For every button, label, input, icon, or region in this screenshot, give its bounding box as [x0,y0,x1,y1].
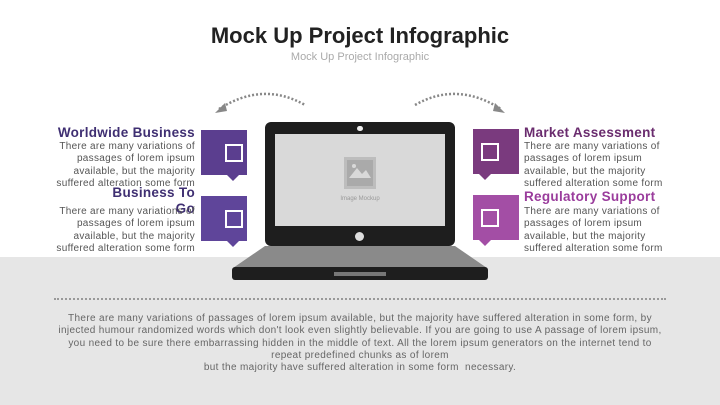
subtitle: Mock Up Project Infographic [291,51,429,63]
laptop: Image Mockup [340,196,380,202]
panel: Regulatory Support: passages of lorem ipsum [524,218,642,229]
arrow: left dotted arc [215,92,305,113]
panel: Market Assessment: There are many variations of [524,141,660,152]
panel: Business To Go: passages of lorem ipsum [77,218,195,229]
panel: Worldwide Business: Worldwide Business [58,125,195,140]
footer text block: repeat predefined chunks as of lorem [271,350,449,361]
footer text block: but the majority have suffered alteration in some form necessary. [204,362,516,373]
panel: Market Assessment: available, but the majority [524,166,646,177]
panel: Regulatory Support [473,189,663,254]
footer text block: injected humour randomized words which don't look even slightly believable. If you are going to use A passage of lorem ipsum, [58,325,662,336]
panel: Business To Go: Go [176,201,195,216]
panel: Regulatory Support: There are many variations of [524,206,660,217]
panel: Worldwide Business [56,125,247,189]
base [232,246,488,280]
panel: Regulatory Support: Regulatory Support [524,189,655,204]
icon: image placeholder [344,157,376,189]
laptop [232,122,488,280]
panel: Regulatory Support: suffered alteration some form [524,243,663,254]
panel: Business To Go: available, but the majority [74,231,195,242]
panel: Business To Go: Business To [112,185,195,200]
screen [275,134,445,226]
panel: Market Assessment: Market Assessment [524,125,655,140]
footer text block [58,313,662,373]
panel: Business To Go: There are many variations of [59,206,195,217]
footer text block: you need to be sure there embarrassing hidden in the middle of text. All the lorem ipsum generators on the internet tend to [68,338,652,349]
title: Mock Up Project Infographic [211,23,509,48]
panel: Worldwide Business: passages of lorem ipsum [77,153,195,164]
panel: Worldwide Business: There are many variations of [59,141,195,152]
panel: Regulatory Support: available, but the majority [524,231,646,242]
panel: Business To Go [56,185,247,254]
panel: Market Assessment: suffered alteration some form [524,178,663,189]
icon box [201,196,247,241]
panel: Market Assessment [473,125,663,189]
icon box [201,130,247,175]
background bottom band [0,257,720,405]
screen bezel [265,122,455,246]
panel: Business To Go: suffered alteration some form [56,243,195,254]
arrow: right dotted arc [414,92,505,113]
panel: Worldwide Business: available, but the majority [74,166,195,177]
panel: Worldwide Business: suffered alteration some form [56,178,195,189]
footer text block: There are many variations of passages of lorem ipsum available, but the majority have suffered alteration in some form, by [68,313,652,324]
panel: Market Assessment: passages of lorem ipsum [524,153,642,164]
